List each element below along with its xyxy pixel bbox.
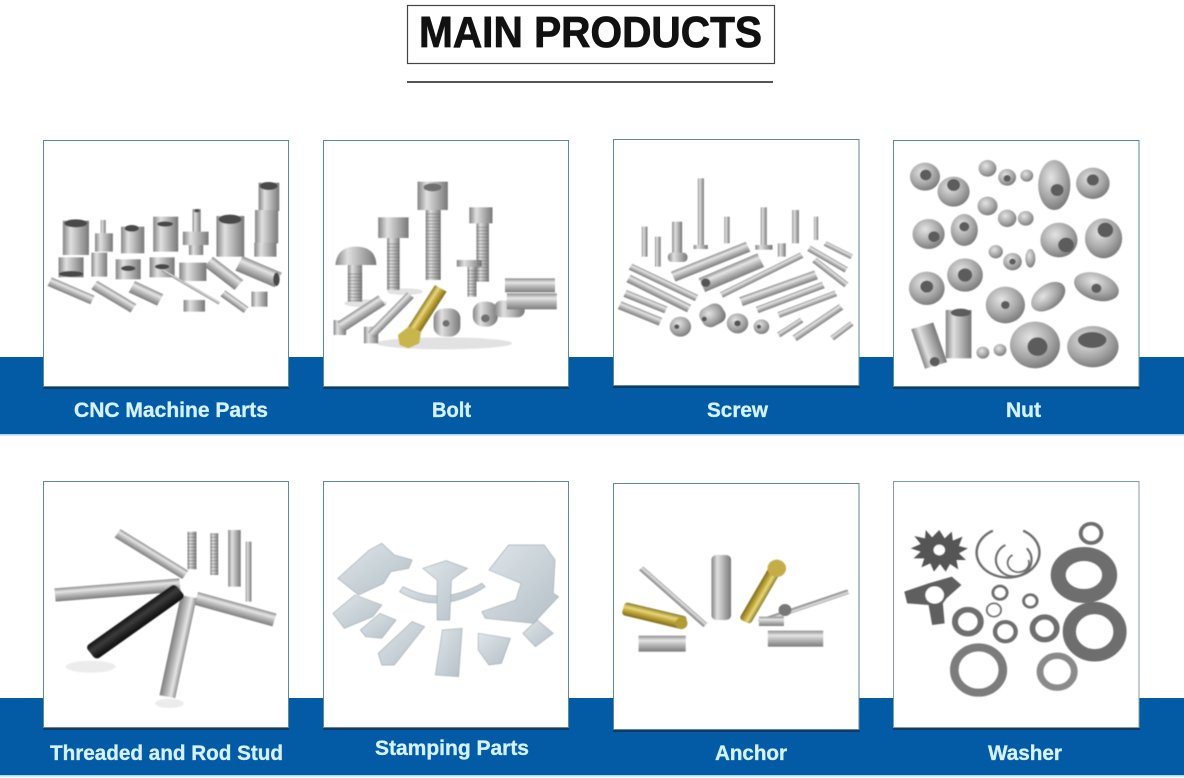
label: Screw: Screw xyxy=(707,399,769,422)
panel: Bolt xyxy=(323,140,569,389)
label: Anchor: Anchor xyxy=(715,742,787,765)
label: Bolt: Bolt xyxy=(432,399,471,422)
blue band: row 2 xyxy=(0,698,1184,776)
panel: CNC Machine Parts xyxy=(43,140,289,389)
label: Washer: Washer xyxy=(988,742,1062,765)
panel: Nut xyxy=(893,140,1140,389)
label: Stamping Parts: Stamping Parts xyxy=(375,737,529,760)
panel: Threaded and Rod Stud xyxy=(43,482,289,730)
panel: Washer xyxy=(893,482,1140,730)
title box: MAIN PRODUCTS xyxy=(419,8,762,57)
label: CNC Machine Parts: CNC Machine Parts xyxy=(74,399,268,422)
label: Nut: Nut xyxy=(1006,399,1041,422)
blue band: row 1 xyxy=(0,357,1184,436)
label: Threaded and Rod Stud: Threaded and Rod Stud xyxy=(50,742,283,765)
panel: Screw xyxy=(613,140,860,388)
panel: Stamping Parts xyxy=(323,482,569,730)
panel: Anchor xyxy=(613,484,860,732)
